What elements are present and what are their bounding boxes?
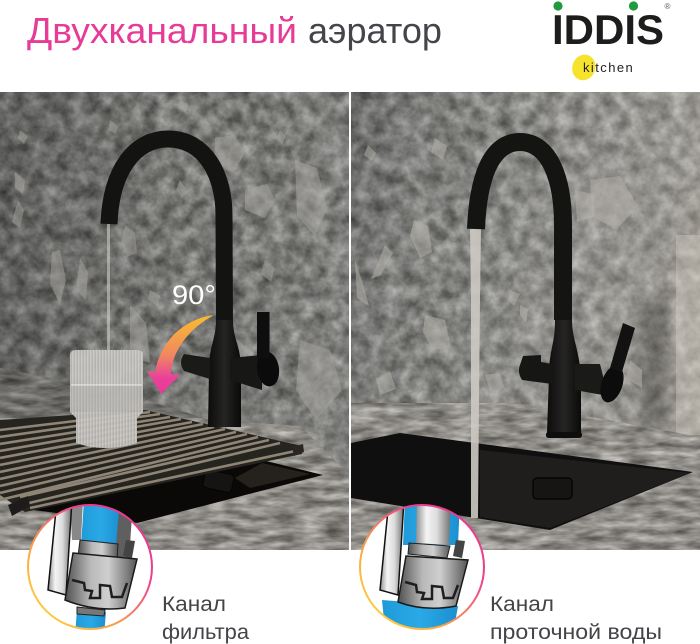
dark sink right — [351, 433, 693, 530]
drying rack — [0, 410, 304, 516]
panel: left photo, filter channel — [0, 92, 349, 550]
label: tap water channel: Канал — [490, 593, 554, 616]
panel: white bottom strip — [0, 550, 700, 644]
title: аэратор — [308, 10, 442, 51]
back counter left — [0, 368, 349, 550]
glass — [70, 350, 143, 448]
inset: left aerator cross-section — [28, 500, 152, 635]
faucet right — [476, 142, 635, 438]
steel cartridge — [65, 553, 137, 609]
logo: IDDIS kitchen: ® — [664, 2, 670, 11]
label: tap water channel — [490, 593, 662, 644]
inset: right aerator cross-section — [360, 500, 484, 640]
counter right — [351, 403, 700, 550]
steel cartridge — [398, 556, 468, 608]
label: filter channel — [162, 593, 249, 644]
logo: IDDIS kitchen: kitchen — [583, 60, 634, 75]
drain plate — [533, 478, 572, 499]
arrow: 90 degree rotation — [147, 315, 214, 394]
faucet left — [109, 139, 281, 427]
label: filter channel: фильтра — [162, 621, 249, 644]
water stream left — [107, 224, 110, 350]
chrome shell — [48, 500, 72, 595]
blue flow channel — [403, 506, 460, 545]
label: 90 degrees: 90° — [172, 280, 216, 310]
label: filter channel: Канал — [162, 593, 226, 616]
spring — [123, 540, 135, 558]
water stream right — [470, 229, 481, 518]
dark sink left — [33, 460, 323, 523]
drain plate left — [204, 472, 233, 492]
title: Двухканальный — [27, 10, 297, 51]
stone wall right — [351, 92, 700, 437]
chrome shell — [380, 500, 404, 595]
logo: IDDIS kitchen — [552, 1, 670, 84]
title — [27, 10, 442, 51]
steel ring — [78, 540, 118, 556]
central steel pipe — [416, 506, 450, 545]
stone wall left — [0, 92, 349, 474]
spring — [453, 540, 465, 558]
logo: IDDIS kitchen: IDDIS — [552, 6, 664, 53]
label: tap water channel: проточной воды — [490, 621, 662, 644]
panel: right photo, tap water channel — [351, 92, 700, 550]
blue filter channel — [81, 506, 119, 544]
